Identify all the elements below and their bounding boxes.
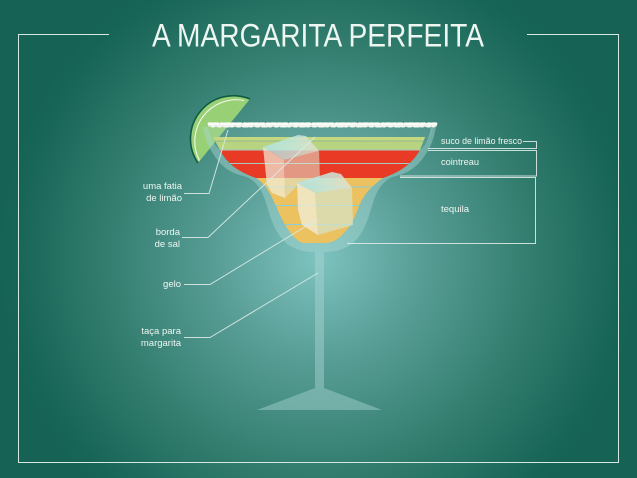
label: cointreau: cointreau xyxy=(441,157,479,168)
level lines xyxy=(205,150,435,164)
label: borda de sal: de sal xyxy=(155,239,180,250)
label: suco de limão fresco: suco de limão fresco xyxy=(441,136,522,147)
lime juice layer xyxy=(205,137,435,150)
ice cube 1 xyxy=(263,135,320,198)
label: uma fatia de limão: uma fatia xyxy=(143,181,183,192)
icon: lime slice xyxy=(190,96,250,163)
cocktail layers xyxy=(205,137,435,245)
label: borda de sal: borda xyxy=(156,227,181,238)
cointreau layer xyxy=(220,150,420,178)
tequila layer xyxy=(256,178,383,243)
label: uma fatia de limão: de limão xyxy=(146,193,182,204)
margarita glass xyxy=(203,124,436,410)
glass cavity xyxy=(206,127,433,178)
title: A MARGARITA PERFEITA xyxy=(152,18,485,54)
label: tequila: tequila xyxy=(441,204,470,215)
ice cube 2 xyxy=(297,172,353,235)
glass wall, stem and base xyxy=(203,127,436,410)
label: taça para margarita: taça para xyxy=(141,326,182,337)
label: taça para margarita: margarita xyxy=(141,338,182,349)
callout lines xyxy=(182,130,536,338)
label: gelo: gelo xyxy=(163,279,181,290)
salt rim xyxy=(209,124,436,126)
